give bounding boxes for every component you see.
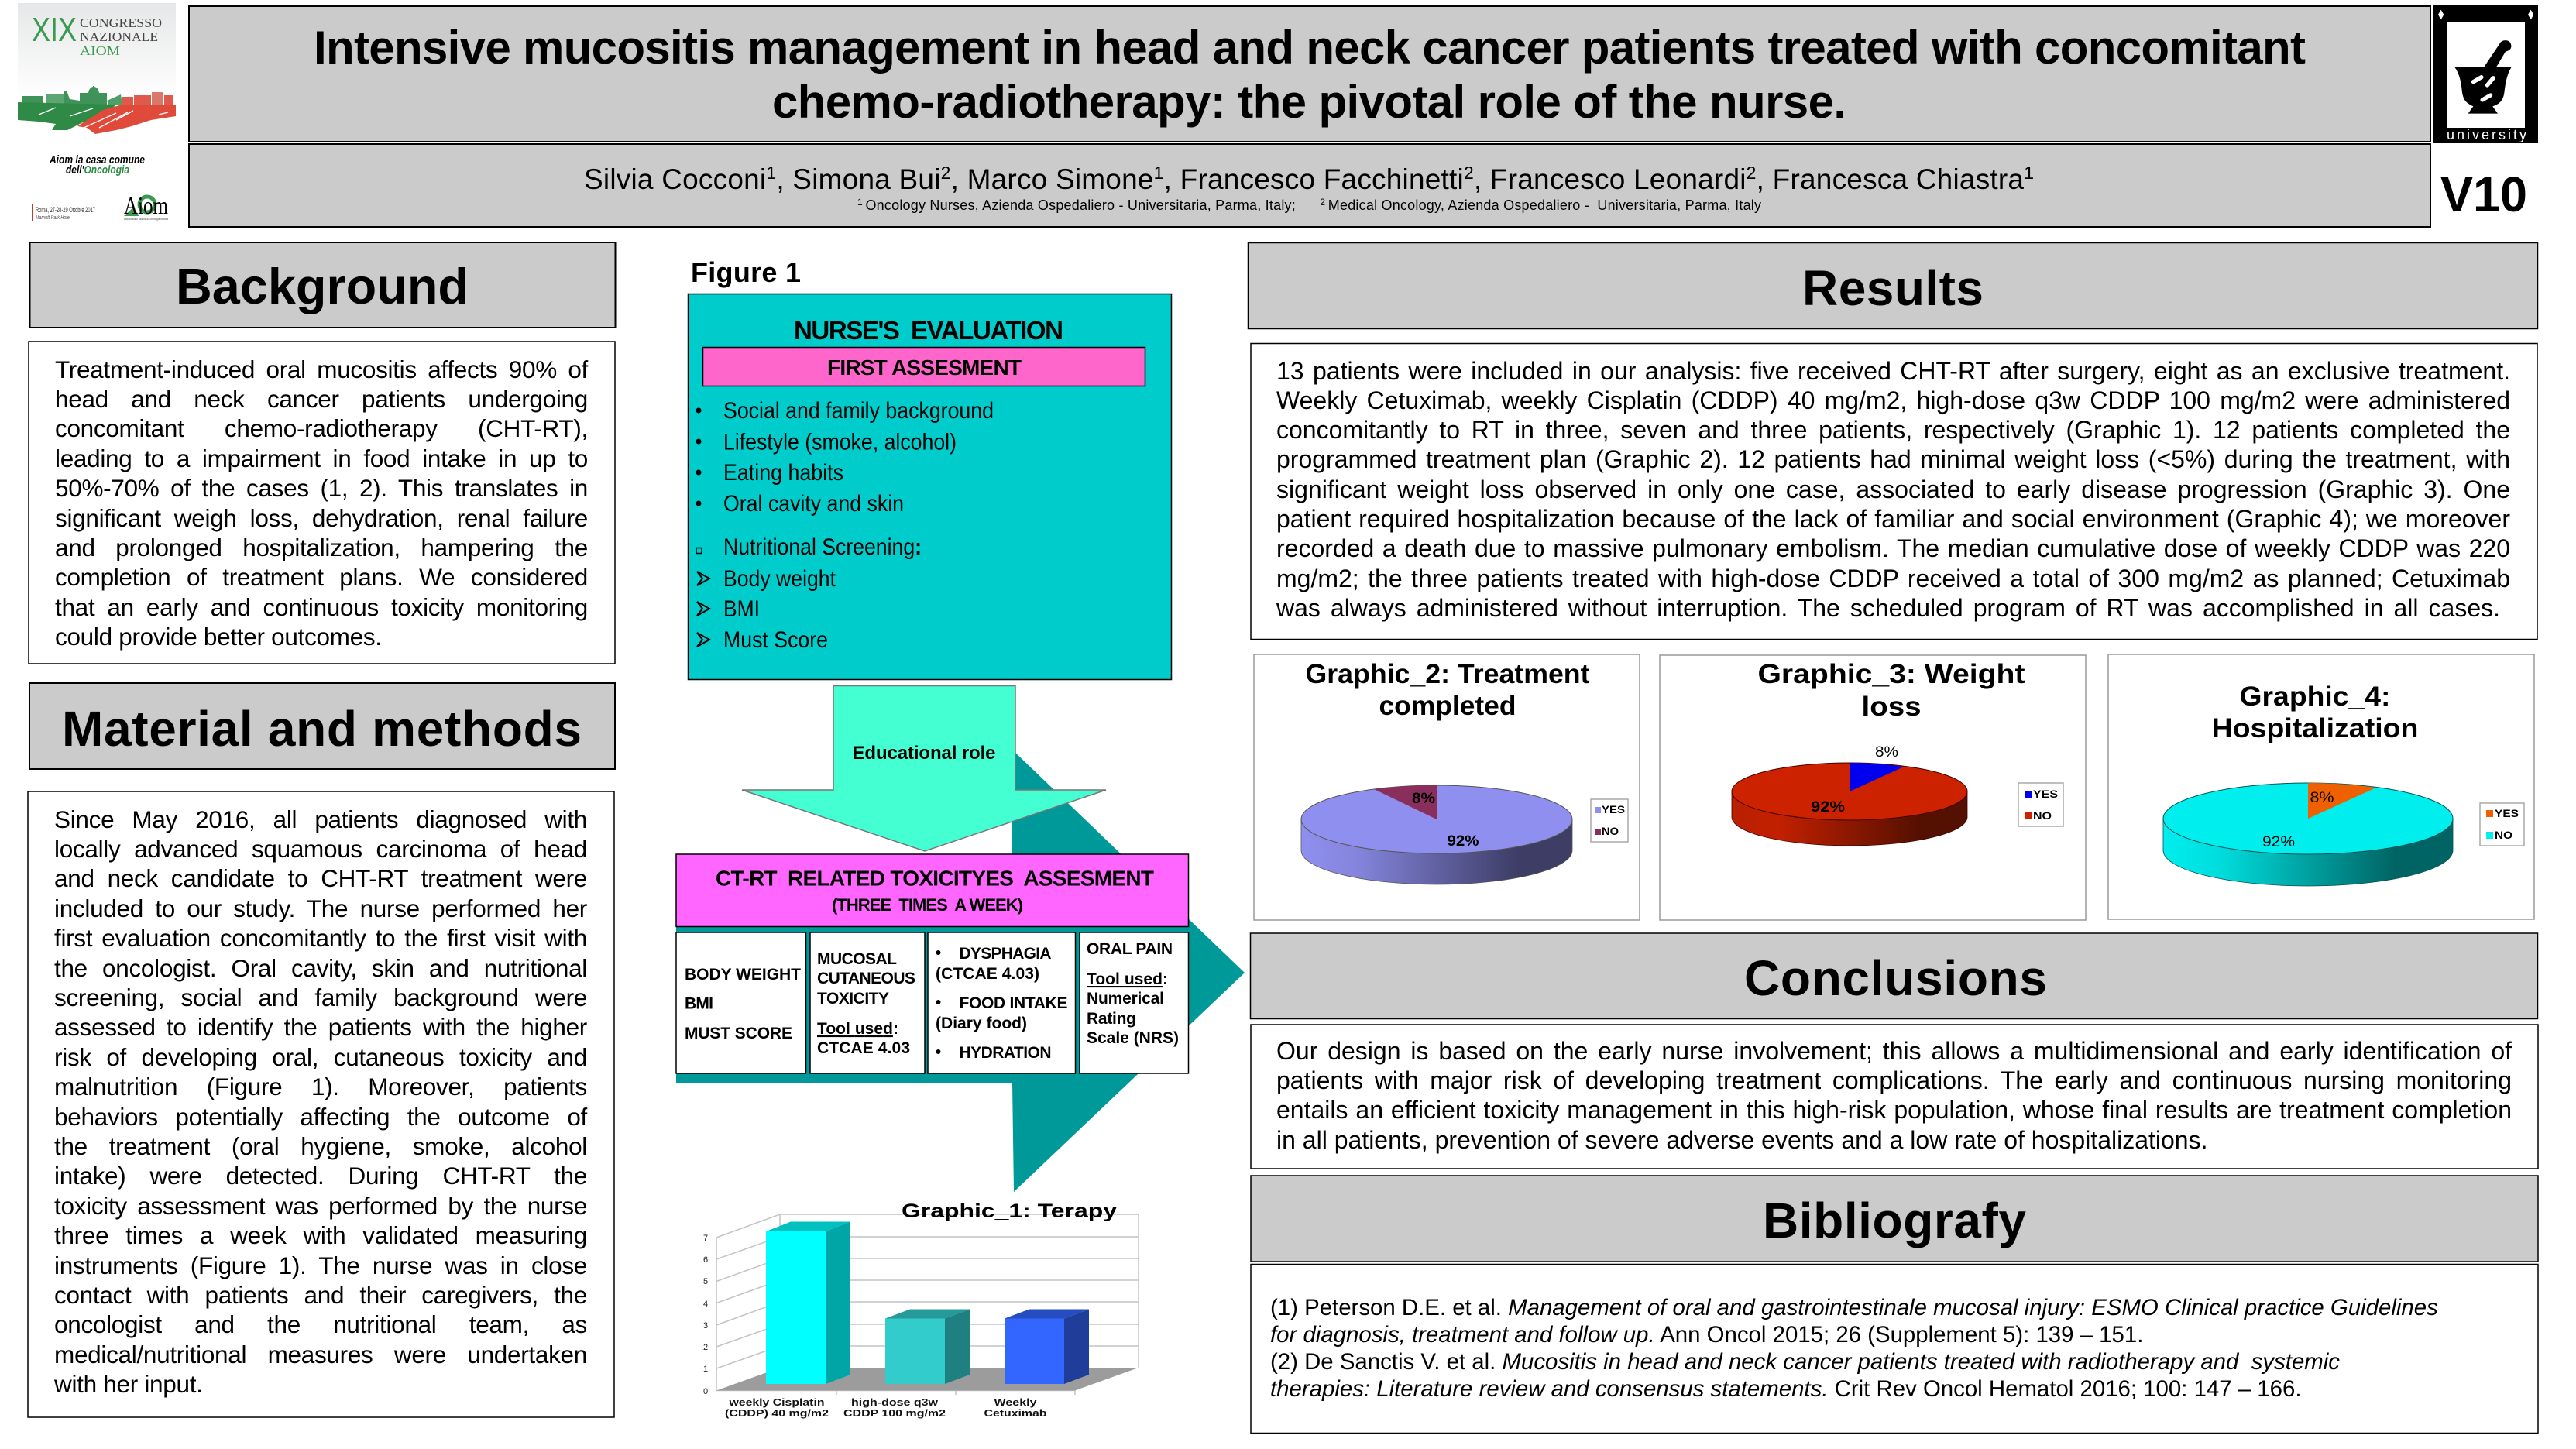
text: results: mg/m2; the three patients treated with high-dose CDDP received a total of 300 mg/m2 as planned; Cetuximab xyxy=(1276,565,2510,592)
panel: nurse's evaluation: Lifestyle (smoke, alcohol) xyxy=(723,429,957,455)
heading: Bibliografy xyxy=(1251,1176,2538,1262)
panel: mucosal cutaneous toxicity box: Tool used: xyxy=(817,1020,898,1038)
panel: mucosal cutaneous toxicity box: CUTANEOUS xyxy=(817,970,915,987)
heading: Conclusions xyxy=(1250,933,2537,1019)
text: results: patient required hospitalization because of the lack of familiar and social environment (Graphic 4); we moreover xyxy=(1276,505,2510,533)
bar chart: graphic 1 therapy: 1 xyxy=(703,1365,708,1374)
authors banner: , Marco Simone xyxy=(951,163,1153,195)
panel: oral pain box: Tool used: xyxy=(1087,970,1168,988)
panel: oral pain box: Numerical xyxy=(1087,990,1164,1008)
heading: Conclusions: Conclusions xyxy=(1744,950,2047,1006)
panel: nurse's evaluation: Body weight xyxy=(723,566,836,592)
skyline buildings xyxy=(22,86,107,105)
pie chart: graphic 3 weight loss: Graphic_3: Weight xyxy=(1758,659,2025,689)
panel: nurse's evaluation: Must Score xyxy=(723,627,828,653)
heading: Material and methods xyxy=(29,683,615,769)
text: results: 13 patients were included in our analysis: five received CHT-RT after surgery, eight as an exclusive treatment. xyxy=(1276,357,2510,385)
panel: dysphagia food hydration box: HYDRATION xyxy=(959,1044,1052,1062)
panel: nurse's evaluation xyxy=(688,294,1171,680)
panel: nurse's evaluation: NURSE'S EVALUATION xyxy=(794,316,1063,345)
panel: toxicities assessment header: CT-RT RELATED TOXICITYES ASSESMENT xyxy=(716,866,1154,891)
authors banner: 1 xyxy=(2024,163,2034,183)
panel: conclusions text box xyxy=(1251,1025,2538,1169)
authors banner xyxy=(189,144,2430,227)
heading: Material and methods: Material and methods xyxy=(62,701,582,757)
arrow: large teal right arrow xyxy=(676,750,1245,1192)
authors banner: , Francesca Chiastra xyxy=(1757,163,2024,195)
arrow: educational role down arrow: Educational role xyxy=(852,743,996,764)
bar chart: graphic 1 therapy: 5 xyxy=(703,1277,708,1286)
authors banner: 2 xyxy=(1464,163,1474,183)
arrow: educational role down arrow xyxy=(742,686,1106,851)
figure 1 label: Figure 1 xyxy=(691,256,801,288)
text: material and methods: three times a week with validated measuring xyxy=(54,1221,587,1249)
title banner: chemo-radiotherapy: the pivotal role of the nurse. xyxy=(772,76,1846,128)
panel: dysphagia food hydration box: FOOD INTAKE xyxy=(959,994,1067,1012)
text: background: could provide better outcomes. xyxy=(55,623,382,651)
panel: mucosal cutaneous toxicity box xyxy=(810,932,925,1073)
conference logo: Associazione Italiana di Oncologia Medica xyxy=(124,217,169,221)
panel: body weight box xyxy=(676,932,805,1073)
panel: oral pain box: Scale (NRS) xyxy=(1087,1029,1179,1047)
bar chart: graphic 1 therapy: 7 xyxy=(703,1234,708,1243)
pie chart: graphic 4 hospitalization: Graphic_4: xyxy=(2240,682,2390,712)
pie chart: graphic 2 treatment completed: YES xyxy=(1602,803,1625,815)
conference logo: Aiom xyxy=(124,191,168,219)
poster code V10: V10 xyxy=(2440,167,2527,222)
conference logo xyxy=(18,3,176,221)
pie chart: graphic 2 treatment completed: NO xyxy=(1602,825,1619,837)
pie chart: graphic 3 weight loss: 92% xyxy=(1811,799,1845,815)
pie chart: graphic 3 weight loss: 8% xyxy=(1875,744,1898,761)
text: material and methods xyxy=(54,805,587,1398)
text: background: head and neck cancer patients undergoing xyxy=(55,385,588,413)
panel: bibliography box xyxy=(1251,1264,2538,1433)
text: material and methods: Since May 2016, all patients diagnosed with xyxy=(54,805,587,833)
panel: mucosal cutaneous toxicity box: CTCAE 4.03 xyxy=(817,1039,910,1057)
panel: methods text box xyxy=(28,791,614,1417)
bar chart: graphic 1 therapy: 0 xyxy=(703,1387,708,1396)
panel: body weight box: MUST SCORE xyxy=(685,1025,792,1042)
panel: nurse's evaluation: BMI xyxy=(723,596,760,622)
authors banner: , Simona Bui xyxy=(776,163,940,195)
pie chart: graphic 3 weight loss: loss xyxy=(1862,692,1921,722)
authors banner: Medical Oncology, Azienda Ospedaliero - Universitaria, Parma, Italy xyxy=(1328,197,1761,213)
text: material and methods: assessed to identify the patients with the higher xyxy=(54,1013,587,1041)
conference logo: XIX xyxy=(32,11,77,49)
text: material and methods: medical/nutritional measures were undertaken xyxy=(54,1341,587,1368)
bar chart: graphic 1 therapy: (CDDP) 40 mg/m2 xyxy=(725,1407,829,1419)
text: material and methods: behaviors potentially affecting the outcome of xyxy=(54,1103,587,1131)
pie chart: graphic 2 treatment completed: Graphic_2: Treatment xyxy=(1306,659,1590,689)
text: material and methods: risk of developing oral, cutaneous toxicity and xyxy=(54,1043,587,1071)
pie chart: graphic 3 weight loss: YES xyxy=(2033,788,2058,800)
text: conclusions: patients with major risk of developing treatment complications. The early and continuous nursing monitoring xyxy=(1276,1066,2512,1094)
conference logo: Roma, 27-28-29 Ottobre 2017 xyxy=(36,206,95,214)
authors banner: , Francesco Facchinetti xyxy=(1164,163,1464,195)
pie chart: graphic 3 weight loss: NO xyxy=(2033,809,2052,822)
pie chart: graphic 4 hospitalization: YES xyxy=(2495,807,2519,819)
conference logo: NAZIONALE xyxy=(80,29,158,44)
authors banner: 2 xyxy=(941,163,950,183)
text: background: that an early and continuous toxicity monitoring xyxy=(55,593,588,621)
pie chart: graphic 4 hospitalization: Hospitalization xyxy=(2212,713,2418,743)
conference logo: AIOM xyxy=(80,43,120,58)
text: background: and prolonged hospitalization, hampering the xyxy=(55,534,588,561)
bar chart: graphic 1 therapy xyxy=(703,1200,1139,1419)
heading: Results xyxy=(1249,243,2537,328)
panel: toxicities assessment header: (THREE TIMES A WEEK) xyxy=(832,895,1023,915)
authors banner: 1 xyxy=(1154,163,1163,183)
panel: background text box xyxy=(29,342,615,664)
panel: dysphagia food hydration box: (CTCAE 4.03) xyxy=(936,965,1039,983)
text: material and methods: screening, social and family background were xyxy=(54,984,587,1011)
panel: body weight box: BODY WEIGHT xyxy=(685,966,801,984)
panel: mucosal cutaneous toxicity box: TOXICITY xyxy=(817,990,889,1008)
text: background: significant weigh loss, dehydration, renal failure xyxy=(55,504,588,532)
authors banner: , Francesco Leonardi xyxy=(1474,163,1746,195)
text: material and methods: and neck candidate to CHT-RT treatment were xyxy=(54,864,587,892)
pie chart: graphic 4 hospitalization: 8% xyxy=(2310,790,2334,806)
bar chart: graphic 1 therapy: Graphic_1: Terapy xyxy=(902,1200,1117,1222)
text: material and methods: intake) were detected. During CHT-RT the xyxy=(54,1162,587,1190)
text: conclusions: Our design is based on the early nurse involvement; this allows a multidimensional and early identification of xyxy=(1276,1037,2512,1065)
text: material and methods: toxicity assessment was performed by the nurse xyxy=(54,1192,587,1220)
text: background: Treatment-induced oral mucositis affects 90% of xyxy=(55,355,588,383)
text: results: programmed treatment plan (Graphic 2). 12 patients had minimal weight loss (<5%) during the treatment, with xyxy=(1276,445,2510,473)
authors banner: 1 xyxy=(857,197,865,208)
pie chart: graphic 4 hospitalization xyxy=(2108,654,2534,919)
panel: oral pain box: ORAL PAIN xyxy=(1087,940,1173,958)
panel: oral pain box xyxy=(1080,932,1188,1073)
text: material and methods: with her input. xyxy=(54,1370,203,1398)
icon: university mortar and pestle logo: university xyxy=(2447,127,2526,142)
bar chart: graphic 1 therapy: 2 xyxy=(703,1343,708,1352)
conference logo: Marriott Park Hotel xyxy=(36,215,70,221)
panel: results text box xyxy=(1251,344,2537,640)
text: material and methods: locally advanced squamous carcinoma of head xyxy=(54,835,587,863)
pie chart: graphic 2 treatment completed: completed xyxy=(1379,691,1516,721)
text: material and methods: included to our study. The nurse performed her xyxy=(54,894,587,922)
conference logo: dell'Oncologia xyxy=(66,163,129,177)
panel: nurse's evaluation: FIRST ASSESMENT xyxy=(827,355,1022,379)
pie chart: graphic 2 treatment completed xyxy=(1254,654,1640,920)
text: material and methods: contact with patients and their caregivers, the xyxy=(54,1281,587,1309)
text: results xyxy=(1276,357,2510,622)
panel: nurse's evaluation: Social and family background xyxy=(723,398,994,424)
panel: toxicities assessment header xyxy=(676,854,1188,926)
panel: nurse's evaluation: Eating habits xyxy=(723,460,843,486)
text: bibliography: (1) Peterson D.E. et al. Management of oral and gastrointestinale mucosal injury: ESMO Clinical practice Guidelines for diagnosis, treatment and follow up. Ann Oncol 2015; 26 (Supplement 5): 139 – 151. (2) De Sanctis V. et al. Mucositis in head and neck cancer patients treated with radiotherapy and systemic therapies: Literature review and consensus statements. Crit Rev Oncol Hematol 2016; 100: 147 – 166. xyxy=(1270,1295,2438,1402)
pie chart: graphic 2 treatment completed: 92% xyxy=(1447,833,1479,850)
heading: Bibliografy: Bibliografy xyxy=(1763,1193,2026,1248)
heading: Results: Results xyxy=(1802,260,1984,316)
panel: oral pain box: Rating xyxy=(1087,1010,1136,1028)
text: results: was always administered without interruption. The scheduled program of RT was accomplished in all cases. xyxy=(1276,594,2500,622)
text: background: concomitant chemo-radiotherapy (CHT-RT), xyxy=(55,414,588,442)
heading: Background xyxy=(29,242,615,328)
text: results: recorded a death due to massive pulmonary embolism. The median cumulative dose of weekly CDDP was 220 xyxy=(1276,534,2510,562)
text: results: concomitantly to RT in three, seven and three patients, respectively (Graphic 1). 12 patients completed the xyxy=(1276,416,2510,444)
authors banner: Silvia Cocconi xyxy=(584,163,766,195)
bar chart: graphic 1 therapy: 3 xyxy=(703,1321,708,1331)
text: background: 50%-70% of the cases (1, 2). This translates in xyxy=(55,474,588,502)
pie chart: graphic 2 treatment completed: 8% xyxy=(1412,791,1435,807)
conference logo: CONGRESSO xyxy=(80,15,162,30)
text: conclusions xyxy=(1276,1037,2512,1154)
authors banner: 2 xyxy=(1747,163,1756,183)
bar chart: graphic 1 therapy: high-dose q3w xyxy=(851,1396,939,1408)
panel: body weight box: BMI xyxy=(685,994,713,1013)
text: background: leading to a impairment in food intake in up to xyxy=(55,445,588,472)
title banner xyxy=(189,6,2430,142)
authors banner: 2 xyxy=(1320,197,1328,208)
panel: dysphagia food hydration box: DYSPHAGIA xyxy=(959,945,1052,963)
text: conclusions: in all patients, prevention of severe adverse events and a low rate of hospitalizations. xyxy=(1276,1126,2207,1154)
bar chart: graphic 1 therapy: CDDP 100 mg/m2 xyxy=(843,1407,946,1419)
authors banner: 1 xyxy=(766,163,776,183)
text: background xyxy=(55,355,589,651)
authors banner: Oncology Nurses, Azienda Ospedaliero - Universitaria, Parma, Italy; xyxy=(865,197,1320,213)
bar chart: graphic 1 therapy: 6 xyxy=(703,1255,708,1265)
text: material and methods: the oncologist. Oral cavity, skin and nutritional xyxy=(54,954,587,982)
panel: mucosal cutaneous toxicity box: MUCOSAL xyxy=(817,950,897,968)
panel: nurse's evaluation: Oral cavity and skin xyxy=(723,491,904,517)
conference logo: Aiom la casa comune xyxy=(49,153,145,167)
text: material and methods: the treatment (oral hygiene, smoke, alcohol xyxy=(54,1132,587,1160)
pie chart: graphic 3 weight loss xyxy=(1660,655,2086,920)
bar chart: graphic 1 therapy: Cetuximab xyxy=(984,1407,1047,1419)
bar chart: graphic 1 therapy: Weekly xyxy=(994,1396,1037,1408)
text: background: completion of treatment plans. We considered xyxy=(55,563,588,591)
pie chart: graphic 4 hospitalization: NO xyxy=(2495,829,2512,841)
text: material and methods: oncologist and the nutritional team, as xyxy=(54,1310,587,1338)
heading: Background: Background xyxy=(176,258,469,314)
pie chart: graphic 4 hospitalization: 92% xyxy=(2262,834,2295,850)
text: material and methods: malnutrition (Figure 1). Moreover, patients xyxy=(54,1073,587,1100)
panel: nurse's evaluation: Nutritional Screening: xyxy=(723,534,922,560)
text: results: Weekly Cetuximab, weekly Cisplatin (CDDP) 40 mg/m2, high-dose q3w CDDP 100 mg/m2 were administered xyxy=(1276,386,2510,414)
text: material and methods: instruments (Figure 1). The nurse was in close xyxy=(54,1252,587,1279)
icon: university mortar and pestle logo xyxy=(2433,5,2538,143)
bar chart: graphic 1 therapy: 4 xyxy=(703,1300,708,1309)
bar chart: graphic 1 therapy: weekly Cisplatin xyxy=(728,1396,825,1408)
panel: dysphagia food hydration box xyxy=(928,932,1075,1073)
text: material and methods: first evaluation concomitantly to the first visit with xyxy=(54,924,587,952)
panel: dysphagia food hydration box: (Diary food) xyxy=(936,1015,1027,1032)
title banner: Intensive mucositis management in head and neck cancer patients treated with concomitant xyxy=(314,22,2306,74)
text: results: significant weight loss observed in only one case, associated to early disease progression (Graphic 3). One xyxy=(1276,476,2510,503)
text: conclusions: entails an efficient toxicity management in this high-risk population, whose final results are treatment completion xyxy=(1276,1096,2512,1124)
